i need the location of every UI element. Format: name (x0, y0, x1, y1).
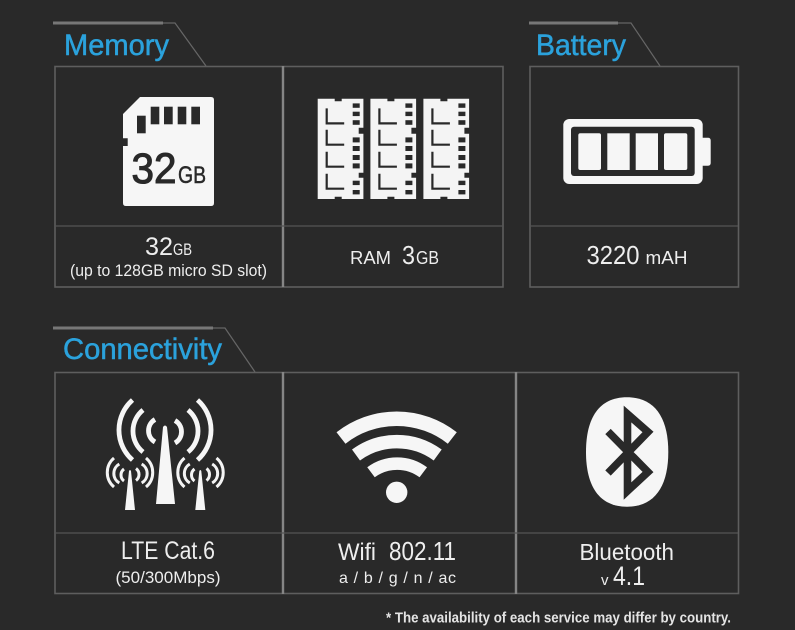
connectivity frame (55, 372, 738, 594)
icon: SD card 32GB (123, 97, 214, 206)
panel: memory (53, 23, 503, 287)
heading tab: connectivity: Connectivity (63, 333, 222, 366)
label: LTE Cat.6: (50/300Mbps) (116, 568, 220, 587)
heading tab: memory (53, 23, 206, 66)
label: LTE Cat.6: LTE Cat.6 (121, 537, 215, 565)
icon: RAM modules (318, 99, 469, 199)
label: RAM 3GB: GB (416, 248, 439, 268)
label: LTE Cat.6 (116, 537, 220, 587)
label: 32GB storage: GB (173, 241, 192, 259)
label: 32GB storage: 32 (145, 233, 173, 261)
footnote: * The availability of each service may differ by country. (386, 610, 731, 626)
panel: connectivity (53, 328, 738, 594)
label: RAM 3GB (350, 240, 439, 270)
label: Wifi 802.11: Wifi (338, 539, 376, 566)
icon: SD card 32GB: 32 (132, 145, 176, 193)
label: RAM 3GB: RAM (350, 248, 391, 268)
label: Bluetooth v4.1: 4.1 (613, 561, 645, 591)
label: Wifi 802.11: 802.11 (389, 536, 456, 566)
icon: SD card 32GB: GB (178, 162, 206, 189)
heading tab: battery (529, 23, 660, 66)
icon: wifi (341, 419, 452, 503)
label: Bluetooth v4.1: Bluetooth (580, 539, 674, 565)
label: 32GB storage: (up to 128GB micro SD slot) (70, 261, 267, 280)
label: 3220 mAH (586, 240, 688, 270)
label: RAM 3GB: 3 (402, 240, 415, 270)
heading tab: memory: Memory (64, 29, 169, 62)
icon: bluetooth (586, 397, 668, 507)
panel: battery (529, 23, 738, 287)
label: Bluetooth v4.1 (580, 539, 674, 591)
battery frame (530, 66, 738, 287)
label: 32GB storage (70, 233, 267, 280)
label: Wifi 802.11: a / b / g / n / ac (339, 570, 456, 587)
icon: battery (563, 119, 711, 184)
label: 3220 mAH: mAH (646, 248, 688, 268)
heading tab: battery: Battery (536, 29, 626, 62)
icon: LTE antenna towers (107, 400, 223, 510)
label: Wifi 802.11 (338, 536, 456, 587)
heading tab: connectivity (53, 328, 255, 372)
memory frame (55, 66, 503, 287)
label: 3220 mAH: 3220 (586, 240, 640, 270)
label: Bluetooth v4.1: v (601, 572, 609, 589)
